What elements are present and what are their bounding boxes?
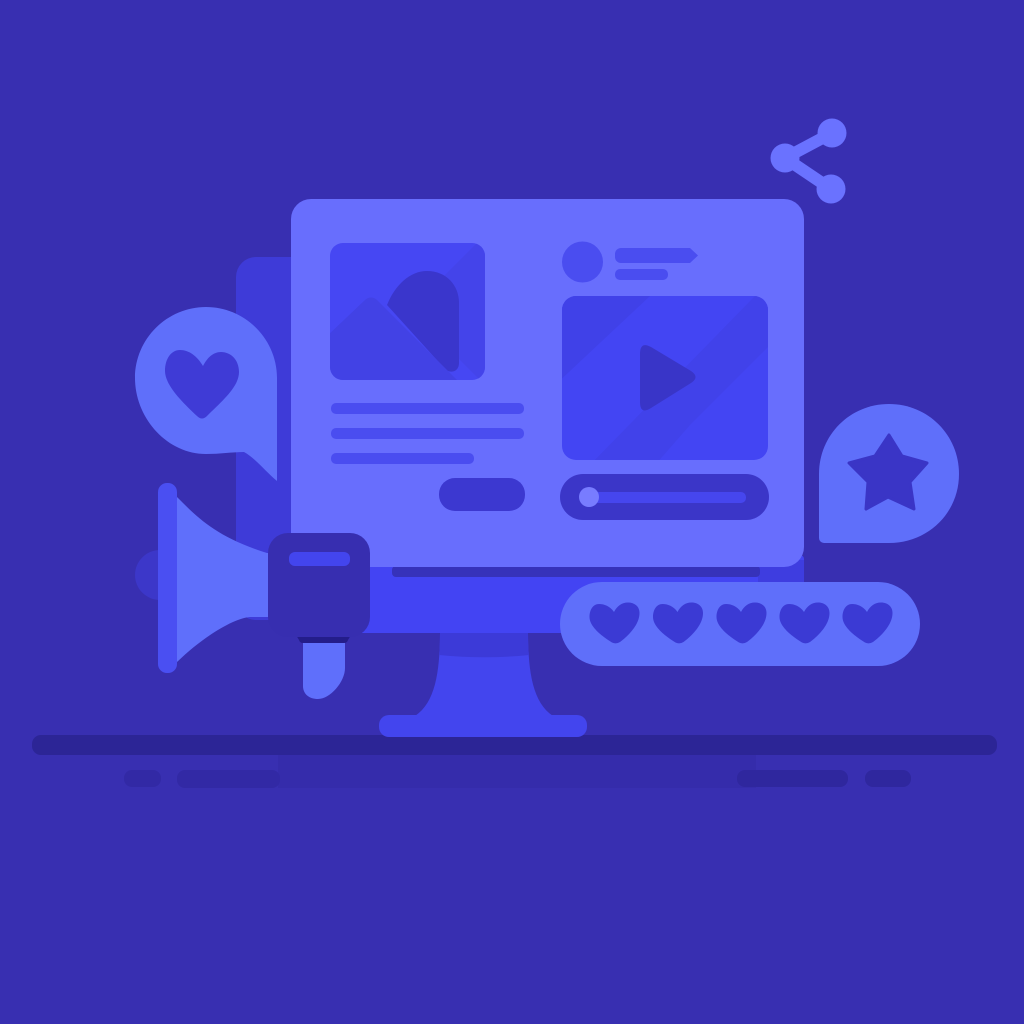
illustration: digital marketing monitor scene — [32, 118, 997, 788]
ground shadow — [32, 735, 997, 788]
back panel — [236, 257, 316, 620]
avatar and name — [562, 242, 698, 282]
progress bar — [560, 474, 769, 520]
image card — [330, 243, 485, 380]
monitor screen — [291, 199, 804, 567]
speech bubble: heart — [135, 307, 277, 481]
megaphone — [135, 483, 370, 699]
icon: share — [770, 118, 846, 204]
monitor stand — [379, 630, 587, 737]
mountain — [330, 298, 456, 380]
rating bar with hearts — [560, 582, 920, 666]
mountain sun — [387, 271, 459, 372]
icon: play — [640, 345, 696, 410]
video card — [555, 296, 775, 465]
monitor chin — [300, 555, 804, 633]
button — [439, 478, 525, 511]
text lines — [331, 403, 524, 464]
speech bubble: star — [819, 404, 959, 543]
